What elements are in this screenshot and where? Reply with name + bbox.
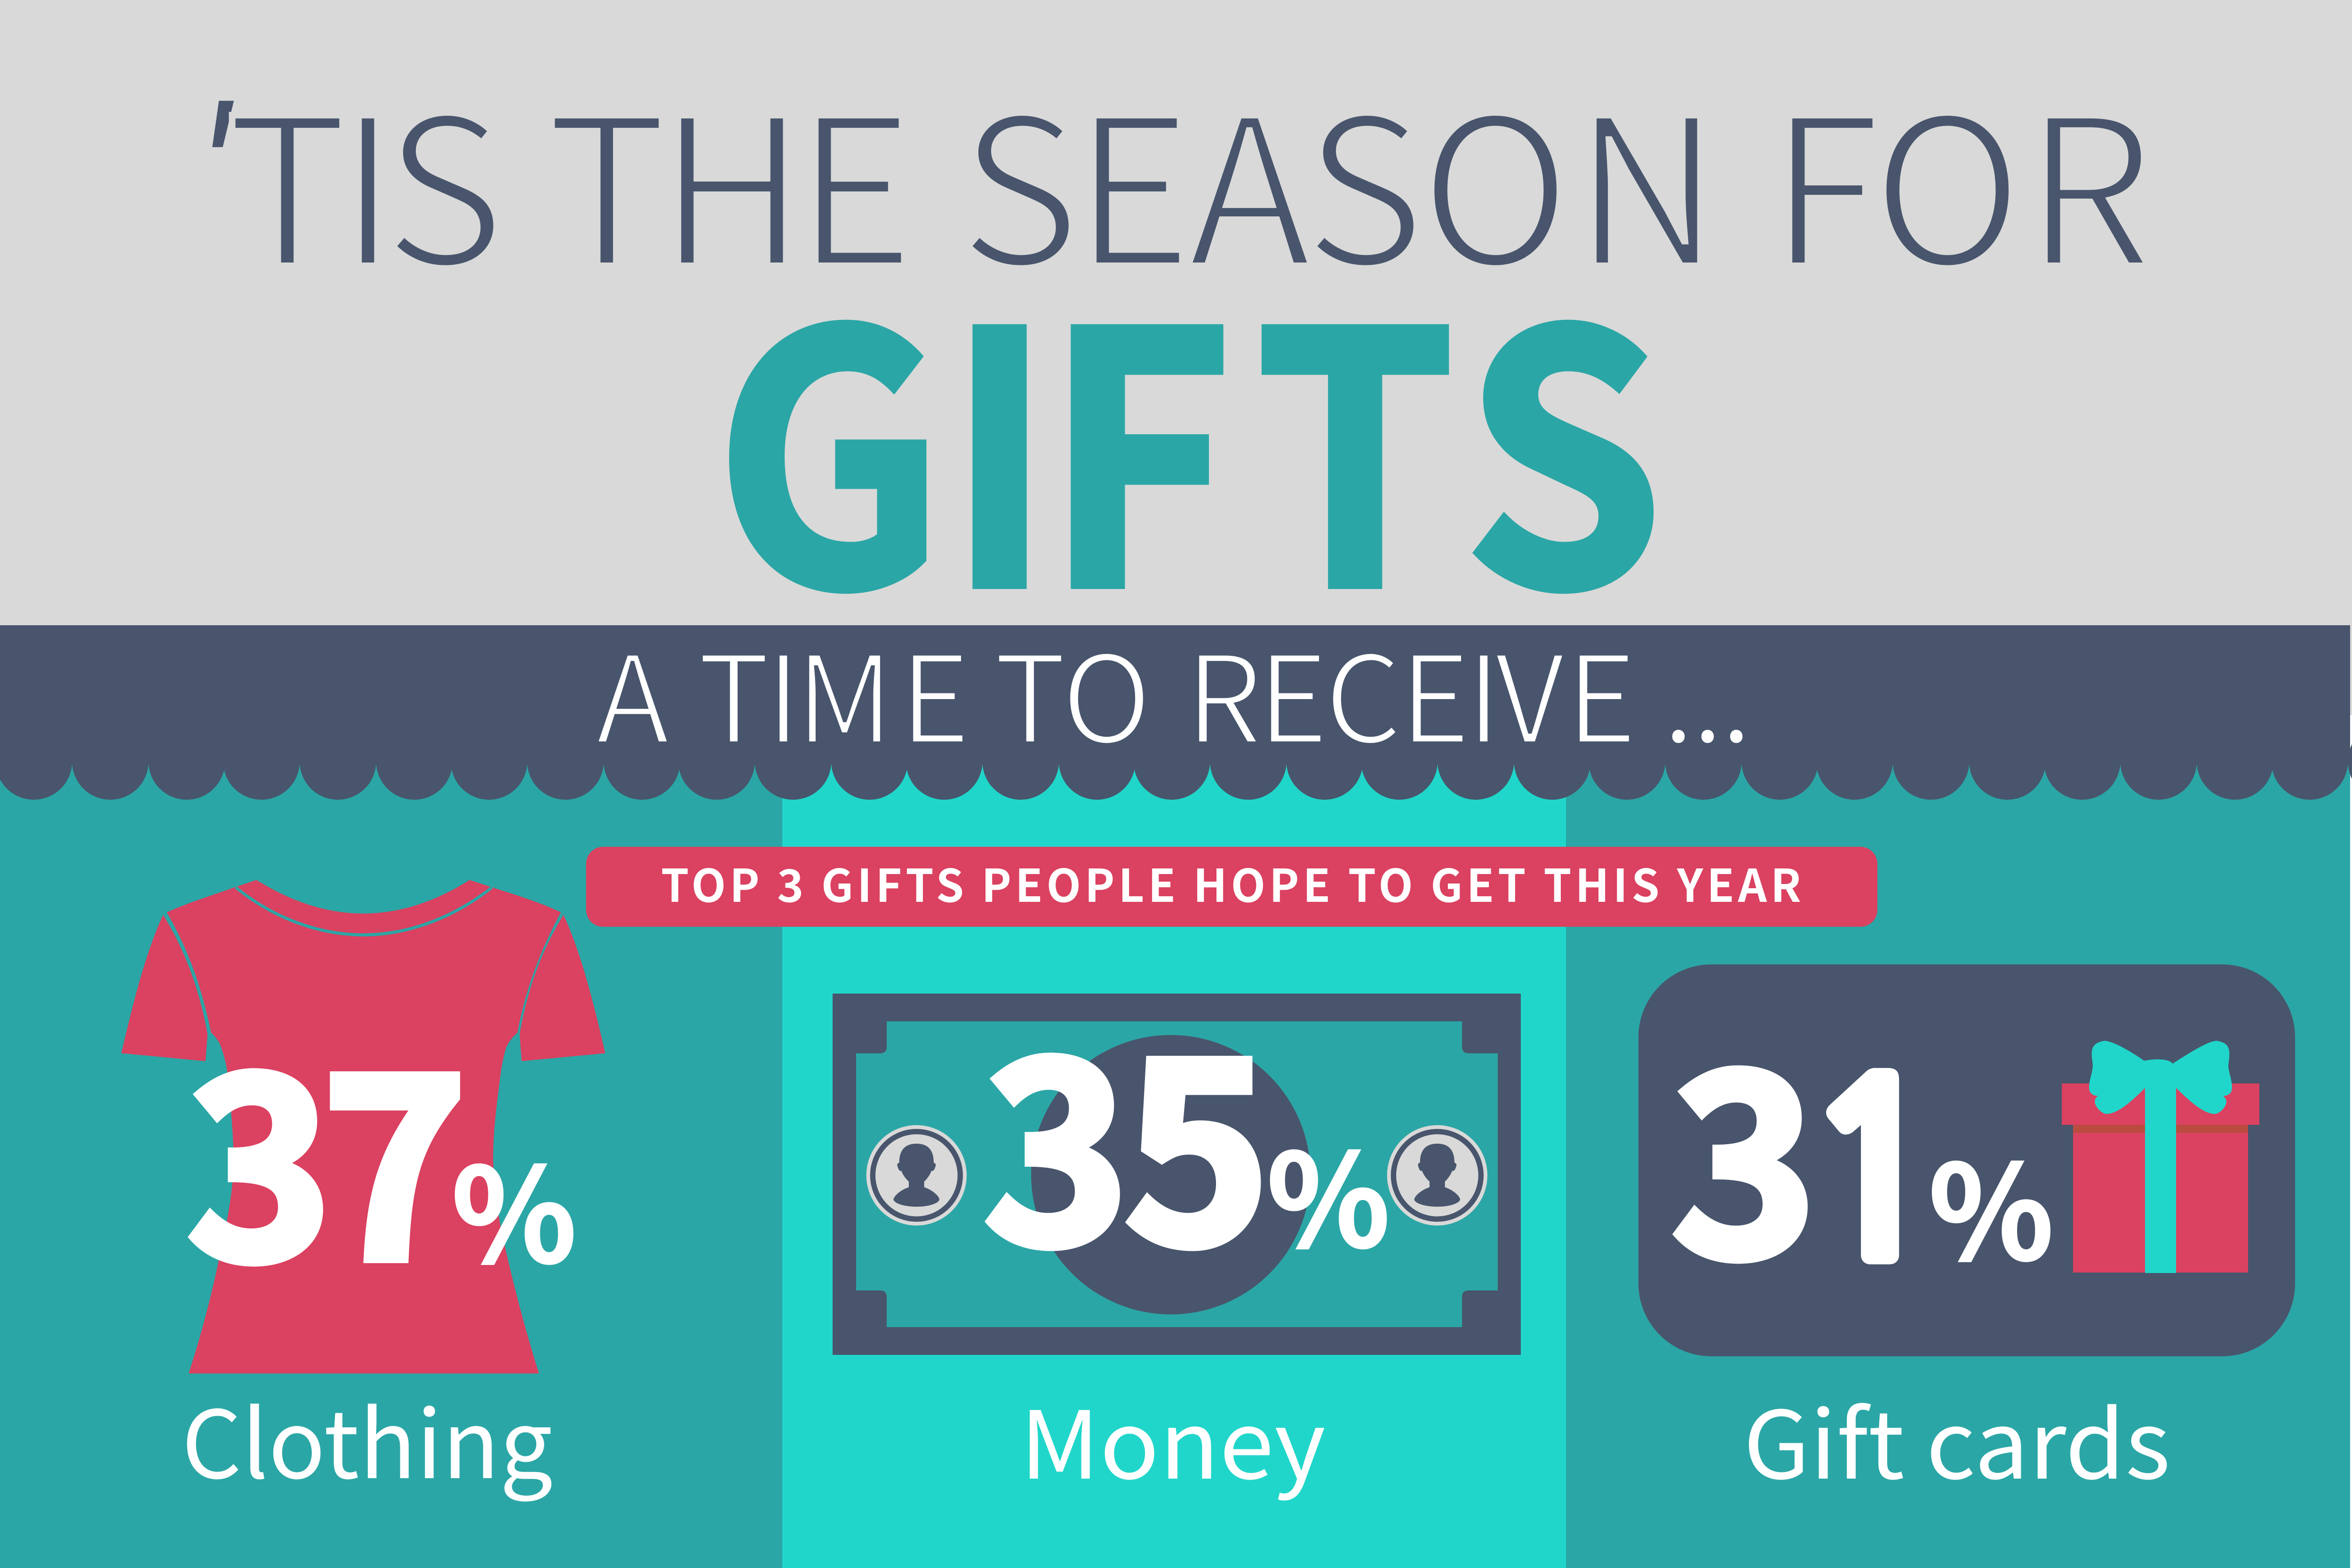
label: money: Money — [1020, 1370, 1326, 1506]
gift card — [1638, 964, 2295, 1356]
subtitle: a time to receive: A TIME TO RECEIVE ... — [596, 601, 1753, 779]
stat: 35 percent: % — [1267, 1098, 1390, 1284]
icon: t-shirt — [121, 880, 605, 1373]
panel: money column — [782, 715, 1566, 1568]
stat: 31 percent: 3 — [1671, 970, 1817, 1328]
stat: 37 percent: 37 — [187, 972, 468, 1330]
stat: 31 percent: % — [1929, 1109, 2054, 1297]
title line 1: 'TIS THE SEASON FOR — [184, 27, 2154, 325]
banner text: TOP 3 GIFTS PEOPLE HOPE TO GET THIS YEAR — [661, 850, 1801, 915]
title line 2: GIFTS: GIFTS — [715, 183, 1663, 685]
subtitle band with scalloped edge — [0, 625, 2352, 800]
banner: top 3 gifts — [586, 847, 1877, 927]
icon: gift box — [2062, 1041, 2259, 1273]
stat: 31 percent: 1 — [1801, 1054, 1948, 1294]
icon: left coin — [866, 1125, 967, 1226]
icon: right coin — [1387, 1125, 1487, 1226]
panel: teal background — [0, 715, 2350, 1568]
stat: 35 percent: 35 — [984, 957, 1270, 1315]
stat: 37 percent: % — [452, 1112, 577, 1300]
stat: 31 percent — [1671, 970, 2054, 1328]
label: gift cards: Gift cards — [1743, 1370, 2170, 1506]
icon: dollar bill — [833, 994, 1521, 1355]
label: clothing: Clothing — [182, 1370, 553, 1505]
header background — [0, 0, 2352, 715]
